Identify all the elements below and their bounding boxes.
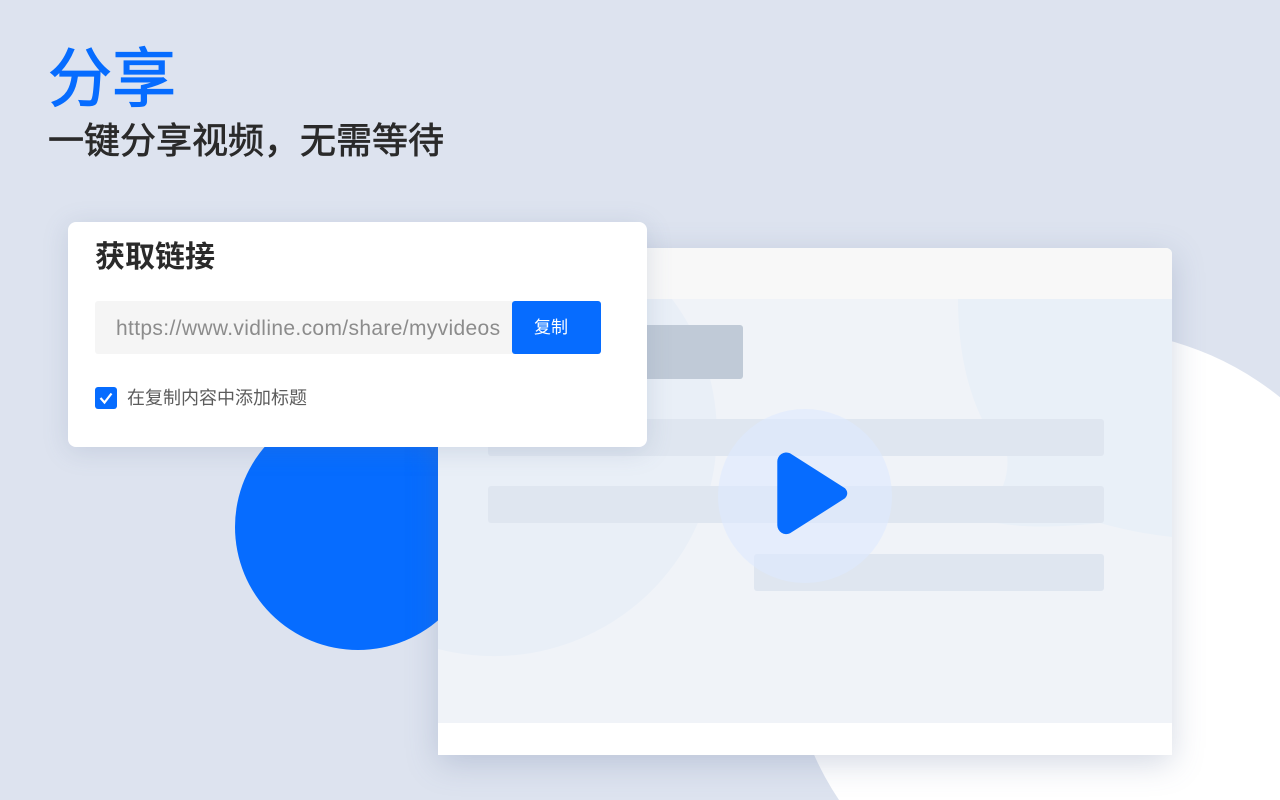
placeholder bar 2 (488, 486, 1104, 523)
placeholder bar 3 (754, 554, 1104, 591)
background white blob (814, 342, 1280, 800)
subtitle: 一键分享视频，无需等待 (48, 120, 444, 161)
decorative shapes (438, 299, 1172, 723)
copy button (512, 301, 601, 354)
title: 分享 (48, 43, 176, 115)
video area (438, 299, 1172, 723)
panel: get link card (68, 222, 647, 447)
blue circle (235, 404, 481, 650)
placeholder bar 1 (488, 419, 1104, 456)
panel: video window (438, 248, 1172, 755)
play button halo (718, 409, 892, 583)
placeholder block (488, 325, 743, 379)
window title bar (438, 248, 1172, 299)
copy button: 复制 (534, 318, 568, 337)
URL input: https://www.vidline.com/share/myvideos (116, 317, 500, 340)
card heading: 获取链接 (95, 241, 215, 274)
checkbox (95, 387, 117, 409)
URL input (95, 301, 513, 354)
icon: check mark (100, 392, 112, 404)
icon: play triangle (777, 452, 848, 534)
checkbox label: 在复制内容中添加标题 (127, 388, 307, 408)
